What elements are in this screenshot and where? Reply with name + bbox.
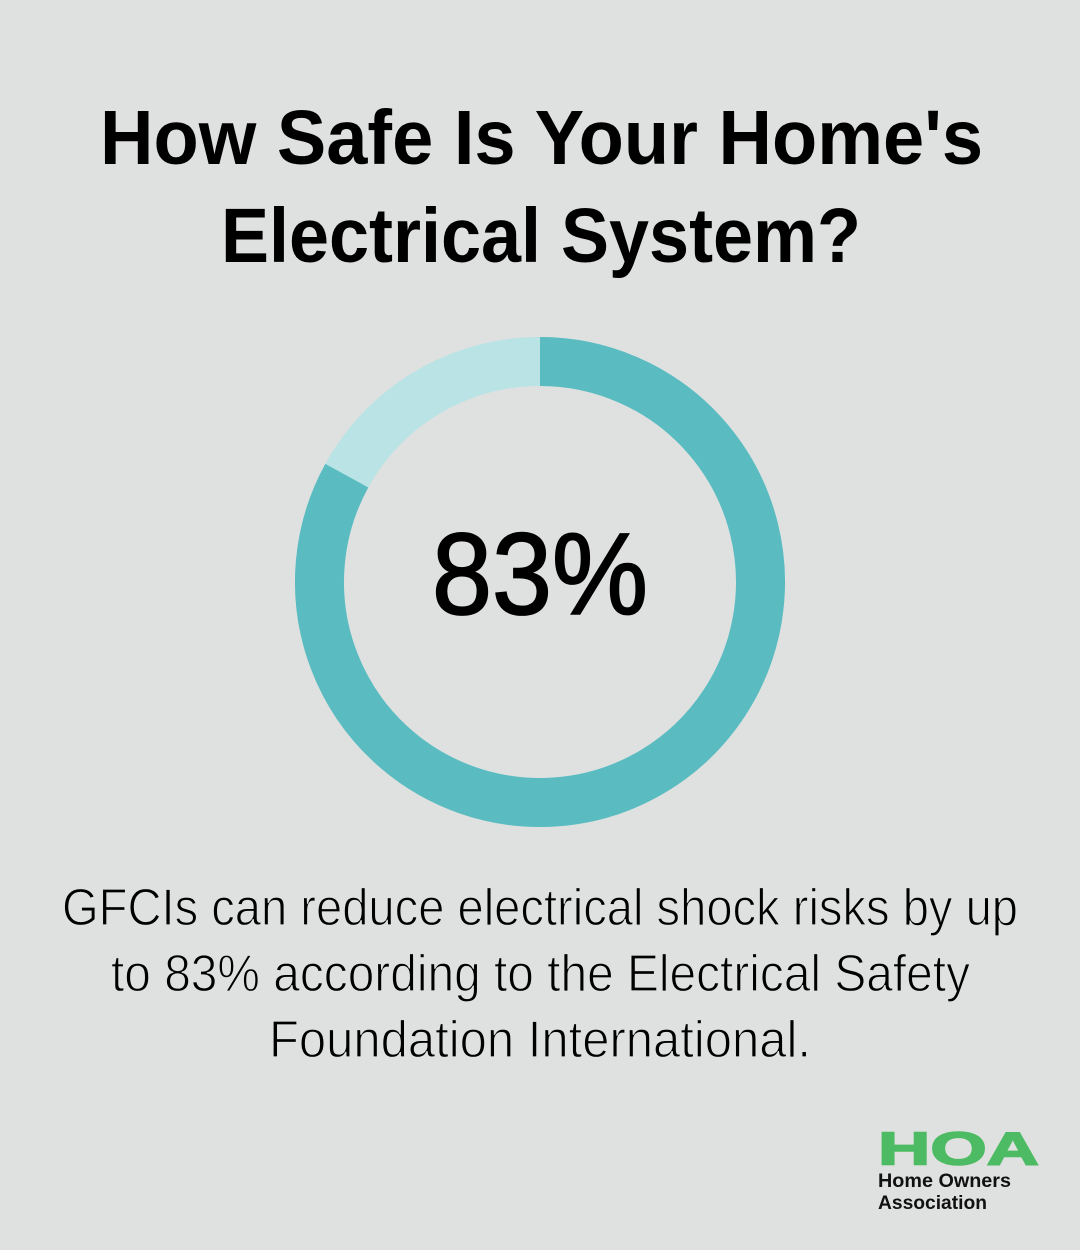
description text (62, 879, 1018, 1069)
donut chart: 83% (319, 362, 760, 802)
donut value: 83% (432, 509, 648, 639)
description text: to 83% according to the Electrical Safety (111, 945, 970, 1003)
description text: Foundation International. (269, 1011, 811, 1069)
logo: Home Owners Association (878, 1122, 1039, 1214)
logo: Home Owners Association: Home Owners (878, 1170, 1011, 1192)
title (100, 95, 983, 279)
logo: Home Owners Association: HOA (878, 1122, 1039, 1174)
title: Electrical System? (221, 193, 861, 279)
logo: Home Owners Association: Association (878, 1192, 987, 1214)
title: How Safe Is Your Home's (100, 95, 983, 181)
